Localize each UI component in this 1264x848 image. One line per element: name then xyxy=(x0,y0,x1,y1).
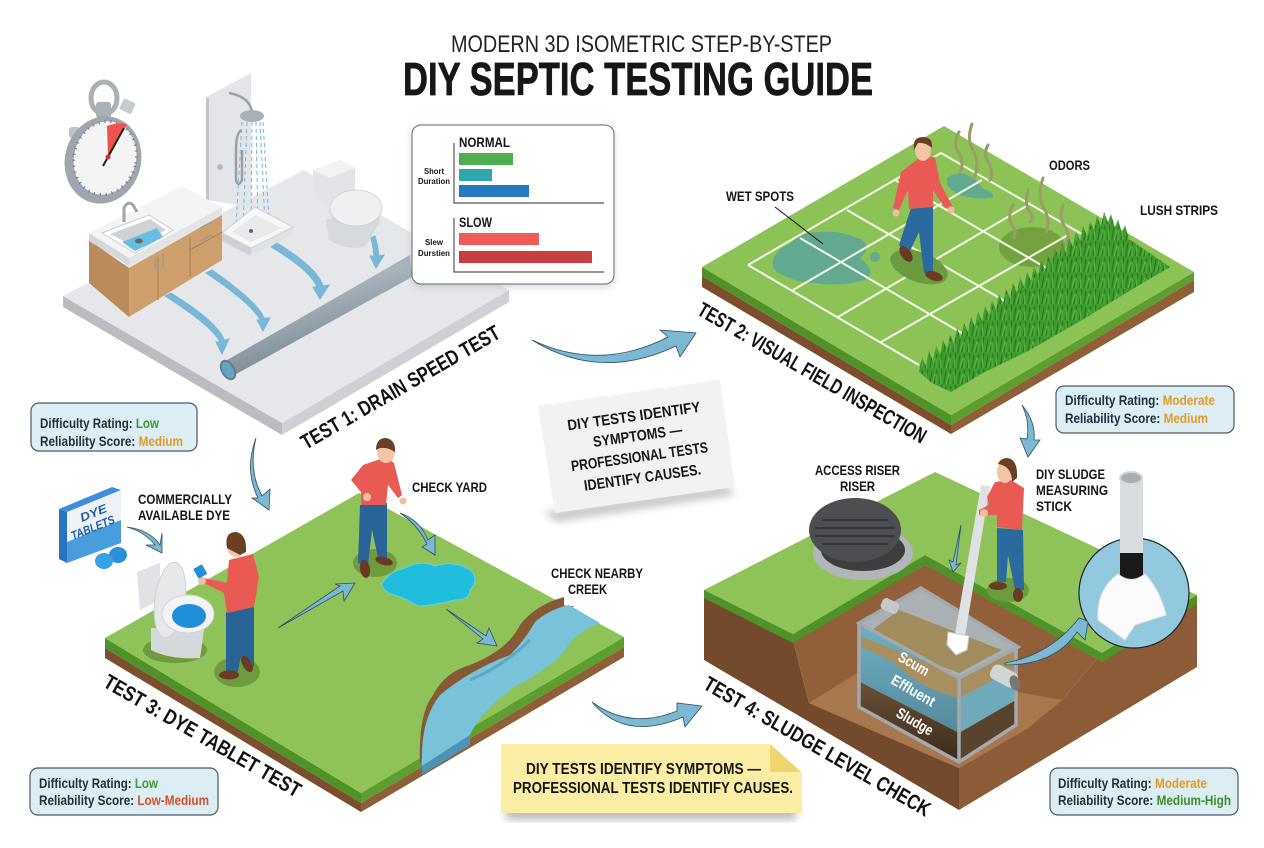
chart card: SLOW xyxy=(459,215,492,230)
label: test 2: TEST 2: VISUAL FIELD INSPECTION xyxy=(694,298,930,448)
chart card xyxy=(412,125,614,287)
odor patch xyxy=(999,227,1065,267)
chart card: Slew xyxy=(425,237,443,247)
arrow: test 3 to test 4 xyxy=(592,702,702,727)
labels: sludge: STICK xyxy=(1036,498,1072,514)
dye tablets box xyxy=(59,487,127,569)
rating badge 4: Reliability Score: Medium-High xyxy=(1058,792,1231,808)
tank layer labels: Scum xyxy=(895,649,932,680)
labels: dye test: CHECK NEARBY xyxy=(551,565,644,581)
labels: field: LUSH STRIPS xyxy=(1140,202,1218,218)
toilet xyxy=(313,160,382,248)
ground block xyxy=(105,493,624,812)
measuring stick xyxy=(947,485,990,655)
callout: sticky note xyxy=(501,744,802,820)
creek xyxy=(420,597,600,775)
callout: sticky note: DIY TESTS IDENTIFY SYMPTOMS — xyxy=(526,761,761,778)
panel: test 3 dye tablet xyxy=(30,438,644,815)
labels: dye test xyxy=(138,479,644,597)
slab xyxy=(63,170,509,435)
person with stick xyxy=(979,458,1029,602)
callout: sticky note: PROFESSIONAL TESTS IDENTIFY CAUSES. xyxy=(513,780,793,797)
chart card: Short xyxy=(424,166,444,176)
rating badge 1 xyxy=(31,403,197,451)
odor wisps xyxy=(956,124,1068,244)
labels: dye test: CREEK xyxy=(568,581,607,597)
callout: paper note: SYMPTOMS — xyxy=(592,422,683,451)
vanity cabinet and sink xyxy=(89,186,222,317)
tank layer labels: Sludge xyxy=(893,705,936,739)
drain arrows xyxy=(165,236,384,354)
rating badge 2 xyxy=(1056,386,1234,433)
person walking xyxy=(886,137,954,291)
test 3 arrows xyxy=(127,513,497,646)
dye tablets box: TABLETS xyxy=(69,513,117,543)
stopwatch xyxy=(55,82,151,212)
labels: dye test: CHECK YARD xyxy=(412,479,487,495)
rating badge 3: Difficulty Rating: Low xyxy=(39,775,158,791)
drain pipe xyxy=(218,255,412,382)
inset: stick detail xyxy=(1079,472,1189,648)
labels: dye test: COMMERCIALLY xyxy=(138,491,233,507)
lawn xyxy=(704,472,1197,662)
labels: sludge: MEASURING xyxy=(1036,482,1108,498)
callout: paper note xyxy=(538,380,735,522)
wet spots xyxy=(773,174,993,284)
labels: field: ODORS xyxy=(1049,157,1090,173)
labels: sludge: RISER xyxy=(840,478,875,494)
labels: sludge: DIY SLUDGE xyxy=(1036,466,1105,482)
callout: paper note: IDENTIFY CAUSES. xyxy=(583,461,702,495)
callout: paper note: DIY TESTS IDENTIFY xyxy=(566,399,701,434)
rating badge 3: Reliability Score: Low-Medium xyxy=(39,792,209,808)
shower wall xyxy=(206,73,264,207)
inspection grid xyxy=(748,153,1106,365)
callout: paper note: PROFESSIONAL TESTS xyxy=(570,439,709,475)
rating badge 4: Difficulty Rating: Moderate xyxy=(1058,775,1207,791)
puddle xyxy=(382,563,475,606)
title xyxy=(403,31,873,105)
tank layer labels xyxy=(888,649,938,739)
rating badge 3 xyxy=(30,768,218,815)
arrow: test 1 to test 2 xyxy=(532,330,696,363)
title: MODERN 3D ISOMETRIC STEP-BY-STEP xyxy=(451,31,832,58)
chart card: Duration xyxy=(418,176,450,186)
ground block xyxy=(702,126,1194,434)
panel: test 1 drain speed xyxy=(31,73,614,454)
rating badge 1: Difficulty Rating: Low xyxy=(40,415,159,431)
labels: field xyxy=(726,157,1218,244)
lush grass strip xyxy=(919,212,1170,392)
labels: sludge xyxy=(815,462,1108,514)
panel: test 4 sludge level xyxy=(700,458,1238,821)
rating badge 4 xyxy=(1050,768,1238,815)
title: DIY SEPTIC TESTING GUIDE xyxy=(403,53,873,105)
labels: dye test: AVAILABLE DYE xyxy=(138,507,230,523)
arrow: test 2 to test 4 xyxy=(1020,405,1040,457)
label: test 3: TEST 3: DYE TABLET TEST xyxy=(100,670,305,802)
labels: sludge: ACCESS RISER xyxy=(815,462,900,478)
tank layer labels: Effluent xyxy=(888,672,938,710)
rating badge 2: Difficulty Rating: Moderate xyxy=(1065,392,1215,408)
shower spray xyxy=(236,122,269,230)
chart card: NORMAL xyxy=(459,135,510,150)
person checking yard xyxy=(351,438,406,579)
access riser lid xyxy=(809,498,913,580)
person dropping tablet xyxy=(193,532,260,687)
label: test 1: TEST 1: DRAIN SPEED TEST xyxy=(297,321,504,454)
panel: test 2 visual field xyxy=(694,124,1234,448)
arrows: tank callouts xyxy=(949,525,1088,665)
soil block xyxy=(704,565,1197,810)
arrow: test 1 to test 3 xyxy=(250,438,270,510)
septic tank xyxy=(859,588,1022,762)
labels: field: WET SPOTS xyxy=(726,188,794,204)
chart card: Durstien xyxy=(418,248,450,258)
toilet with dye xyxy=(137,560,214,663)
rating badge 2: Reliability Score: Medium xyxy=(1065,410,1208,426)
rating badge 1: Reliability Score: Medium xyxy=(40,433,183,449)
shower tray xyxy=(222,207,293,256)
dye tablets box: DYE xyxy=(78,501,110,525)
